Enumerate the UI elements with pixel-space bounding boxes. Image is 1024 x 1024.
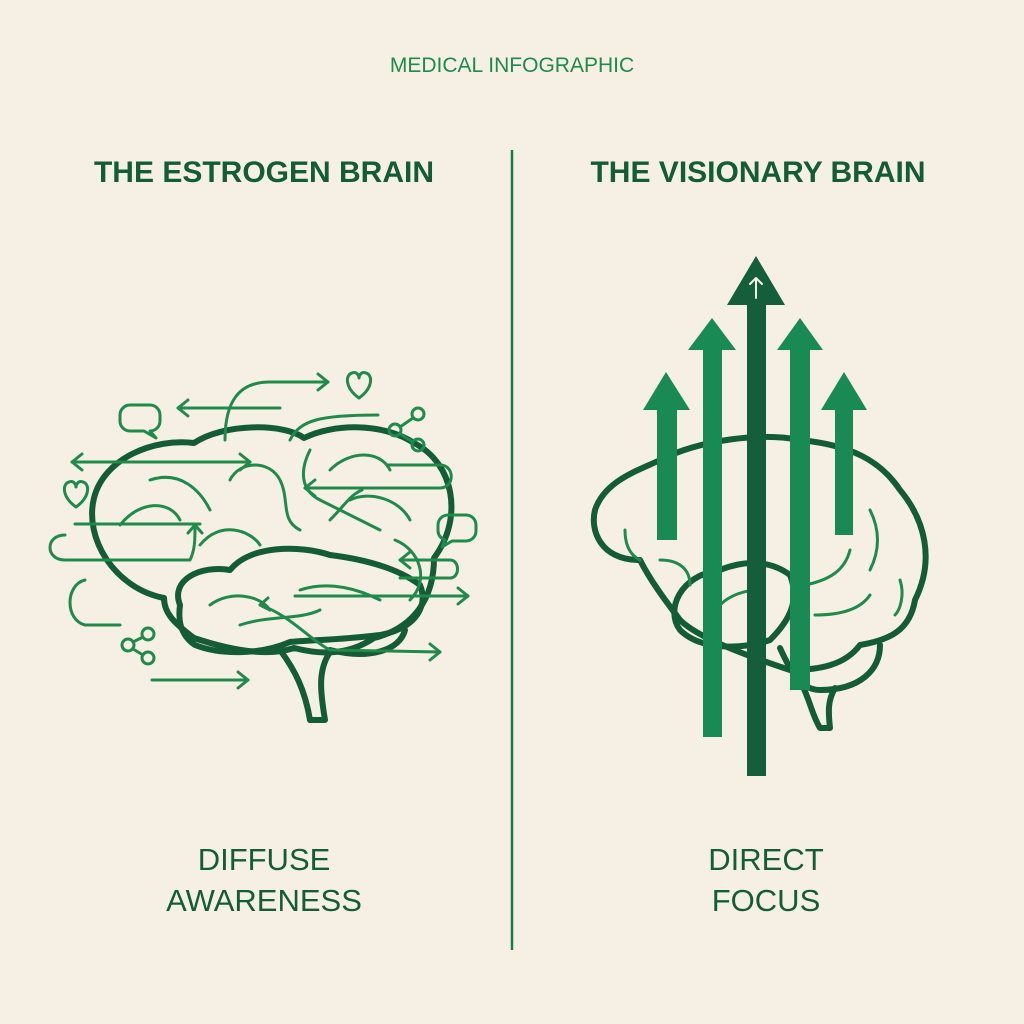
temporal lobe [674,563,794,647]
stem [280,650,330,720]
central arrow [727,256,785,776]
arrow 2 [688,318,736,737]
caption left: DIFFUSE [198,842,330,877]
right brain illustration [594,256,926,776]
caption right: DIRECT [708,842,824,877]
arrow 4 [777,318,823,690]
header label: MEDICAL INFOGRAPHIC [390,54,634,77]
text: AWARENESS [166,883,362,918]
arrows [643,318,867,737]
brain outline [92,427,451,652]
icons: speech bubbles, hearts, share [64,373,476,664]
temporal lobe [178,549,423,652]
folds [625,510,902,615]
divider [511,150,513,950]
arrow 5 [821,372,867,535]
heading: estrogen brain: THE ESTROGEN BRAIN [94,156,434,189]
heading: visionary brain: THE VISIONARY BRAIN [590,156,926,189]
folds [120,450,421,625]
arrow 1 [643,372,690,540]
left brain illustration [50,373,476,720]
cerebellum [330,630,405,654]
text: FOCUS [712,883,820,918]
flow arrows [50,374,468,688]
brain outline [594,437,926,670]
cerebellum and stem [780,645,880,728]
